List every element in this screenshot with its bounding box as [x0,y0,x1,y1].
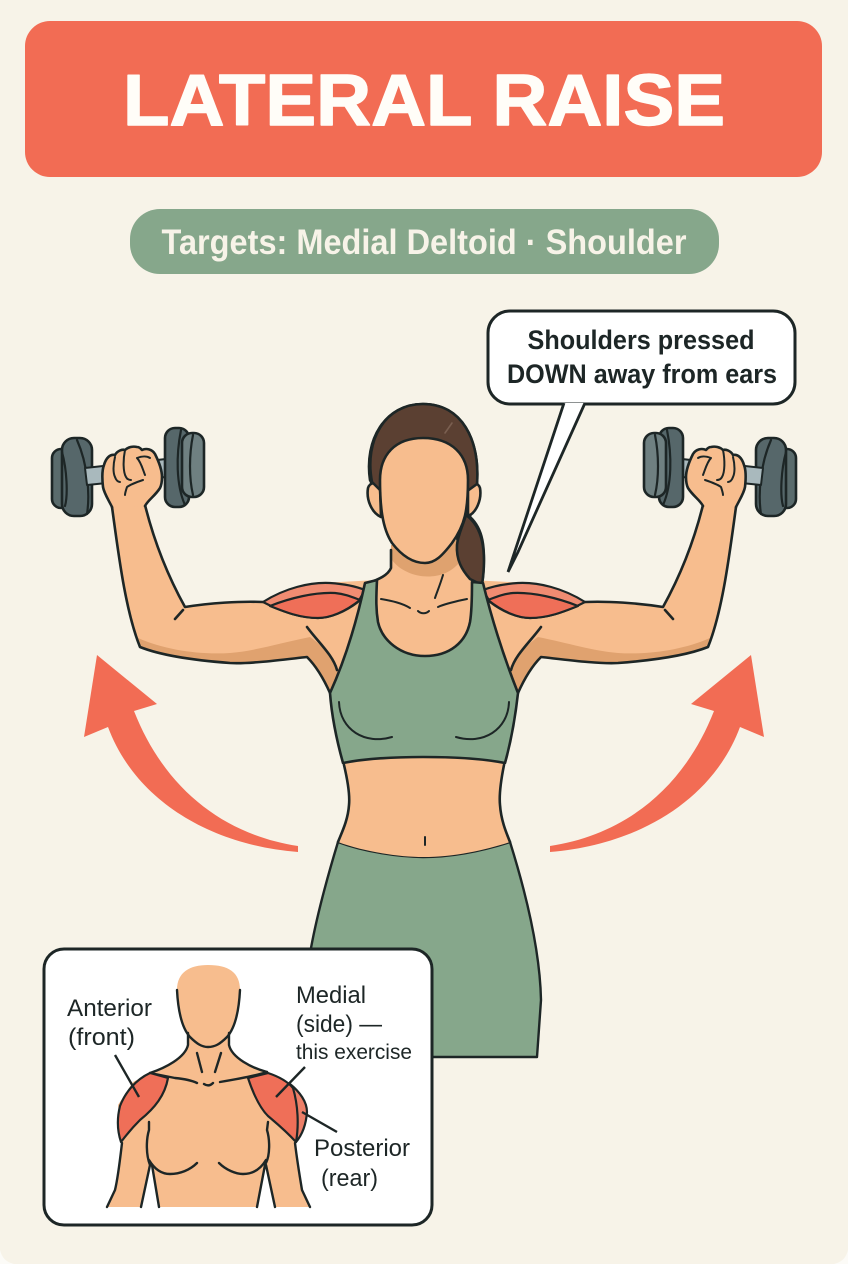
callout: shoulders pressed down [488,311,795,573]
right arm [448,500,736,700]
ponytail front [457,515,484,585]
target muscles pill: Targets: Medial Deltoid · Shoulder [162,223,687,262]
face [380,438,468,563]
title banner: LATERAL RAISE [123,61,725,141]
callout: shoulders pressed down: Shoulders pressed [528,325,754,355]
neck and chest [338,545,510,857]
front label: (front) [68,1024,135,1051]
shorts [311,842,541,1057]
ponytail and hair [369,404,484,585]
inset: deltoid anatomy [44,949,432,1225]
this exercise label: this exercise [296,1041,412,1064]
inset outlines [107,990,310,1207]
leader lines [115,1055,337,1132]
medial deltoid [248,1073,298,1142]
posterior label: Posterior [314,1135,410,1162]
anterior deltoid [118,1073,168,1142]
left motion arrow [84,655,298,852]
left deltoid [263,583,365,618]
hair top [370,404,477,492]
target muscles pill [130,209,719,274]
neck outline [366,550,391,584]
right dumbbell and hand [644,428,796,516]
hair strand [445,423,452,433]
right deltoid [483,583,585,618]
medial label: Medial [296,982,366,1009]
posterior deltoid [290,1084,307,1142]
left dumbbell and hand [52,428,204,516]
waist outlines [338,765,510,842]
ears [368,483,480,517]
inset body [107,965,310,1207]
anterior label: Anterior [67,995,152,1022]
neck shadow [391,540,458,576]
left arm [112,500,400,700]
callout: shoulders pressed down: DOWN away from ears [507,359,777,389]
collarbones and navel [381,575,467,845]
title banner [25,21,822,177]
side label: (side) — [296,1011,382,1038]
rear label: (rear) [321,1165,378,1192]
sports bra [330,580,518,763]
bra details [339,702,509,739]
right motion arrow [550,655,764,852]
figure [52,404,796,1057]
